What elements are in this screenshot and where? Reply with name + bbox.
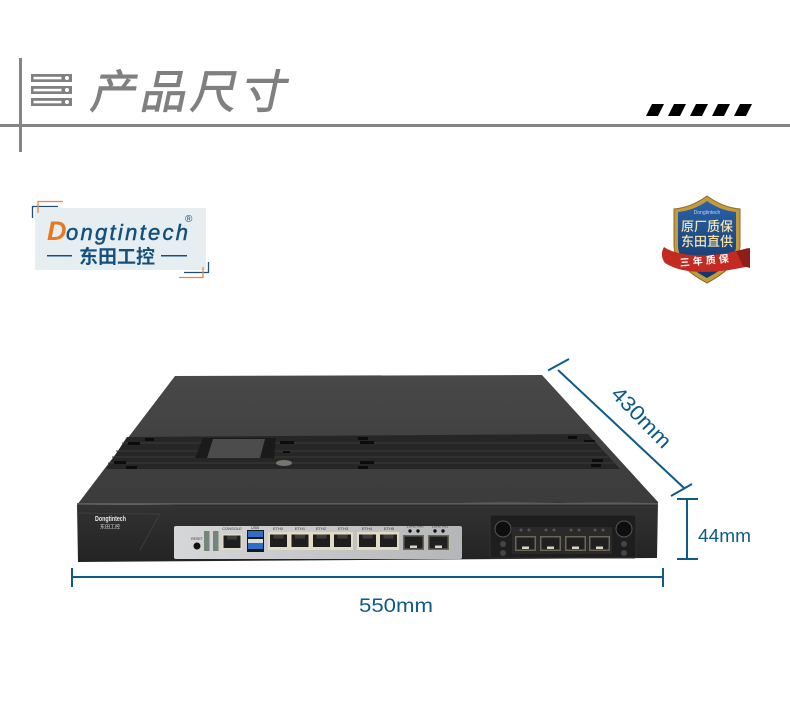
- IO plate: [174, 524, 462, 559]
- SFP ports: [403, 535, 424, 550]
- thumb screws: [495, 521, 511, 537]
- shield: [674, 196, 740, 283]
- dimension: depth 430mm: 430mm: [606, 382, 676, 453]
- warranty badge: 东田直供: [681, 234, 733, 249]
- USB ports: USB: [251, 525, 259, 530]
- module SFP ports: [515, 536, 536, 551]
- ETH labels: ETH3: [338, 526, 349, 531]
- rail screw: [276, 460, 292, 466]
- dimension: height 44mm: [677, 499, 751, 559]
- logo corner brackets: [32, 202, 208, 278]
- ETH labels: [273, 524, 449, 531]
- logo: Dongtintech: [32, 202, 208, 278]
- ETH labels: ETH2: [316, 526, 327, 531]
- ribbon text: 三年质保: [679, 252, 732, 269]
- chassis front: [77, 502, 658, 562]
- ribbon: [662, 247, 750, 272]
- logo background: [35, 208, 206, 270]
- ETH labels: ETH1: [295, 526, 306, 531]
- icon: server stack: [31, 74, 72, 106]
- rail clips: [114, 436, 603, 469]
- dimension: depth 430mm: [548, 359, 692, 496]
- decorative slanted blocks: [646, 104, 752, 116]
- dimension: width 550mm: 550mm: [359, 595, 433, 617]
- section header: [0, 58, 790, 152]
- logo wordmark: D: [47, 216, 66, 246]
- expansion module: [490, 515, 636, 558]
- ethernet ports: [268, 533, 288, 548]
- ETH labels: 1G-ETH0: [407, 524, 424, 528]
- registered mark: ®: [185, 214, 193, 225]
- logo side lines: [47, 255, 187, 256]
- logo chinese name: 东田工控: [79, 245, 155, 268]
- status LEDs: [204, 531, 210, 551]
- warranty badge: [662, 196, 750, 283]
- badge brand: Dongtintech: [694, 210, 721, 216]
- IO plate: RESET: [191, 537, 204, 541]
- rail window: [195, 438, 276, 458]
- title: 产品尺寸: [87, 66, 294, 118]
- header vertical rule: [19, 58, 22, 152]
- front brand: 东田工控: [100, 524, 120, 530]
- logo: Dongtintech: ongtintech: [66, 220, 188, 245]
- header horizontal rule: [0, 124, 790, 127]
- ethernet port frames: [268, 532, 353, 550]
- ETH labels: ETH0: [273, 526, 284, 531]
- badge text: 原厂质保: [681, 219, 733, 234]
- reset button: [194, 542, 200, 550]
- console port: CONSOLE: [222, 526, 242, 531]
- front brand: Dongtintech: [95, 516, 126, 523]
- product: rack server: [77, 375, 658, 562]
- front brand: [95, 516, 126, 530]
- dimension: height 44mm: 44mm: [698, 525, 751, 546]
- top rail band: [106, 434, 620, 469]
- ETH labels: ETH5: [384, 526, 395, 531]
- chassis top: [77, 375, 658, 505]
- ETH labels: ETH4: [362, 526, 373, 531]
- ETH labels: 1G-ETH1: [432, 524, 449, 528]
